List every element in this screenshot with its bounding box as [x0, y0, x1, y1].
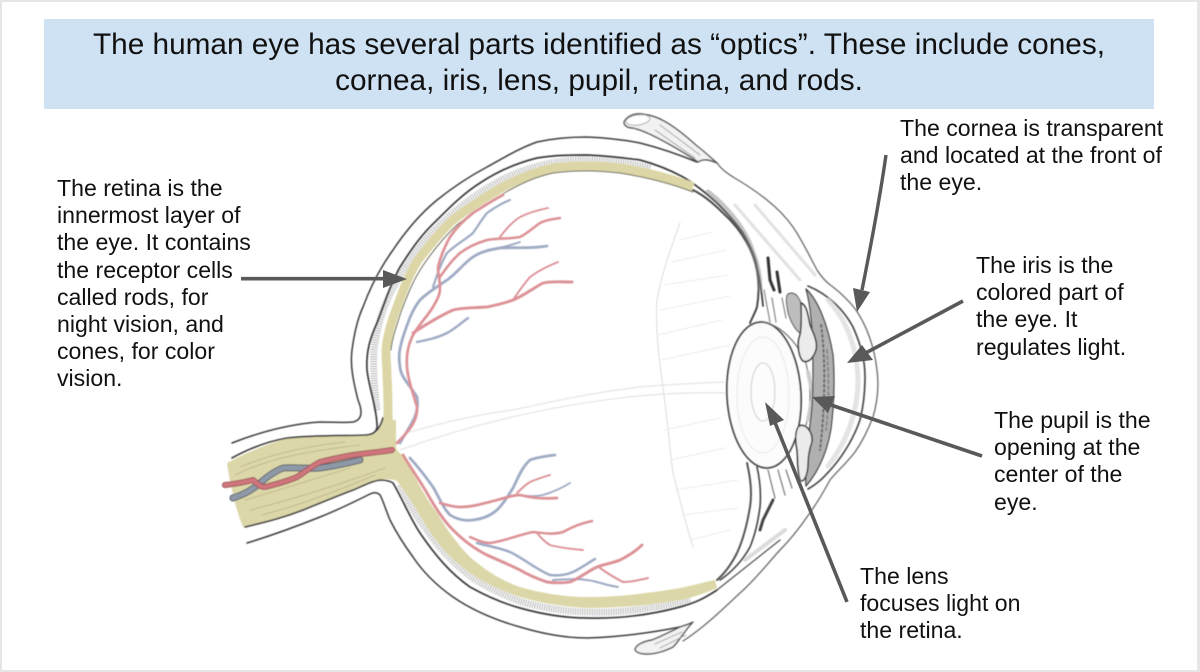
text: pupil: center of the — [994, 461, 1122, 487]
retinal arteries red — [397, 195, 648, 583]
retina outline top — [391, 171, 693, 350]
text: cornea: the eye. — [900, 169, 982, 195]
text: retina: cones, for color — [57, 338, 215, 364]
text: lens: focuses light on — [860, 590, 1020, 616]
text: cornea — [900, 115, 1163, 195]
text: iris: the eye. It — [976, 306, 1077, 332]
text: pupil: The pupil is the — [994, 407, 1151, 433]
ciliary muscle bottom — [717, 463, 792, 590]
text: lens — [860, 563, 1020, 643]
cornea inner line — [808, 286, 865, 489]
ciliary process upper — [786, 293, 816, 362]
text: pupil — [994, 407, 1151, 515]
text: iris: colored part of — [976, 279, 1124, 305]
ciliary fan in vitreous — [657, 223, 738, 547]
text: retina: called rods, for — [57, 284, 208, 310]
title banner: cornea, iris, lens, pupil, retina, and rods. — [335, 64, 863, 97]
iris stripe — [806, 289, 834, 486]
optic nerve fibres — [235, 442, 385, 515]
ciliary muscle and suspensory fibres top — [693, 190, 815, 323]
text: lens: The lens — [860, 563, 949, 589]
optic nerve — [227, 420, 717, 608]
arrow: retina — [241, 270, 407, 288]
text: retina: innermost layer of — [57, 202, 241, 228]
cornea shading — [828, 300, 858, 466]
text: cornea: and located at the front of — [900, 142, 1162, 168]
sclera hatching band — [374, 160, 690, 612]
text: retina: the receptor cells — [57, 257, 233, 283]
text: retina: night vision, and — [57, 311, 224, 337]
text: pupil: opening at the — [994, 434, 1140, 460]
ciliary process lower — [796, 425, 812, 481]
text: lens: the retina. — [860, 617, 963, 643]
faint optical axis lines — [400, 382, 727, 450]
arrow: lens — [765, 402, 847, 602]
arrow: cornea — [853, 155, 886, 312]
text: retina — [57, 175, 251, 391]
text: iris: regulates light. — [976, 334, 1126, 360]
text: iris: The iris is the — [976, 252, 1113, 278]
eye illustration — [225, 113, 878, 654]
text: iris — [976, 252, 1126, 360]
retinal veins blue — [399, 200, 618, 587]
title banner: The human eye has several parts identified as “optics”. These include cones, — [93, 28, 1105, 61]
optic nerve outline — [232, 418, 393, 527]
arrow: pupil — [812, 396, 982, 456]
sclera outer outline — [232, 137, 878, 641]
lower eye muscle — [635, 622, 693, 654]
text: retina: the eye. It contains — [57, 229, 251, 255]
text: retina: vision. — [57, 365, 122, 391]
arrow: iris — [847, 301, 963, 363]
sclera inner dark line — [367, 155, 763, 618]
text: cornea: The cornea is transparent — [900, 115, 1163, 141]
vessels in nerve — [225, 450, 392, 498]
text: pupil: eye. — [994, 489, 1038, 515]
title banner — [44, 19, 1154, 109]
text: retina: The retina is the — [57, 175, 223, 201]
lens — [723, 320, 813, 470]
retina yellow band top — [386, 166, 693, 438]
upper eye muscle — [624, 113, 717, 163]
